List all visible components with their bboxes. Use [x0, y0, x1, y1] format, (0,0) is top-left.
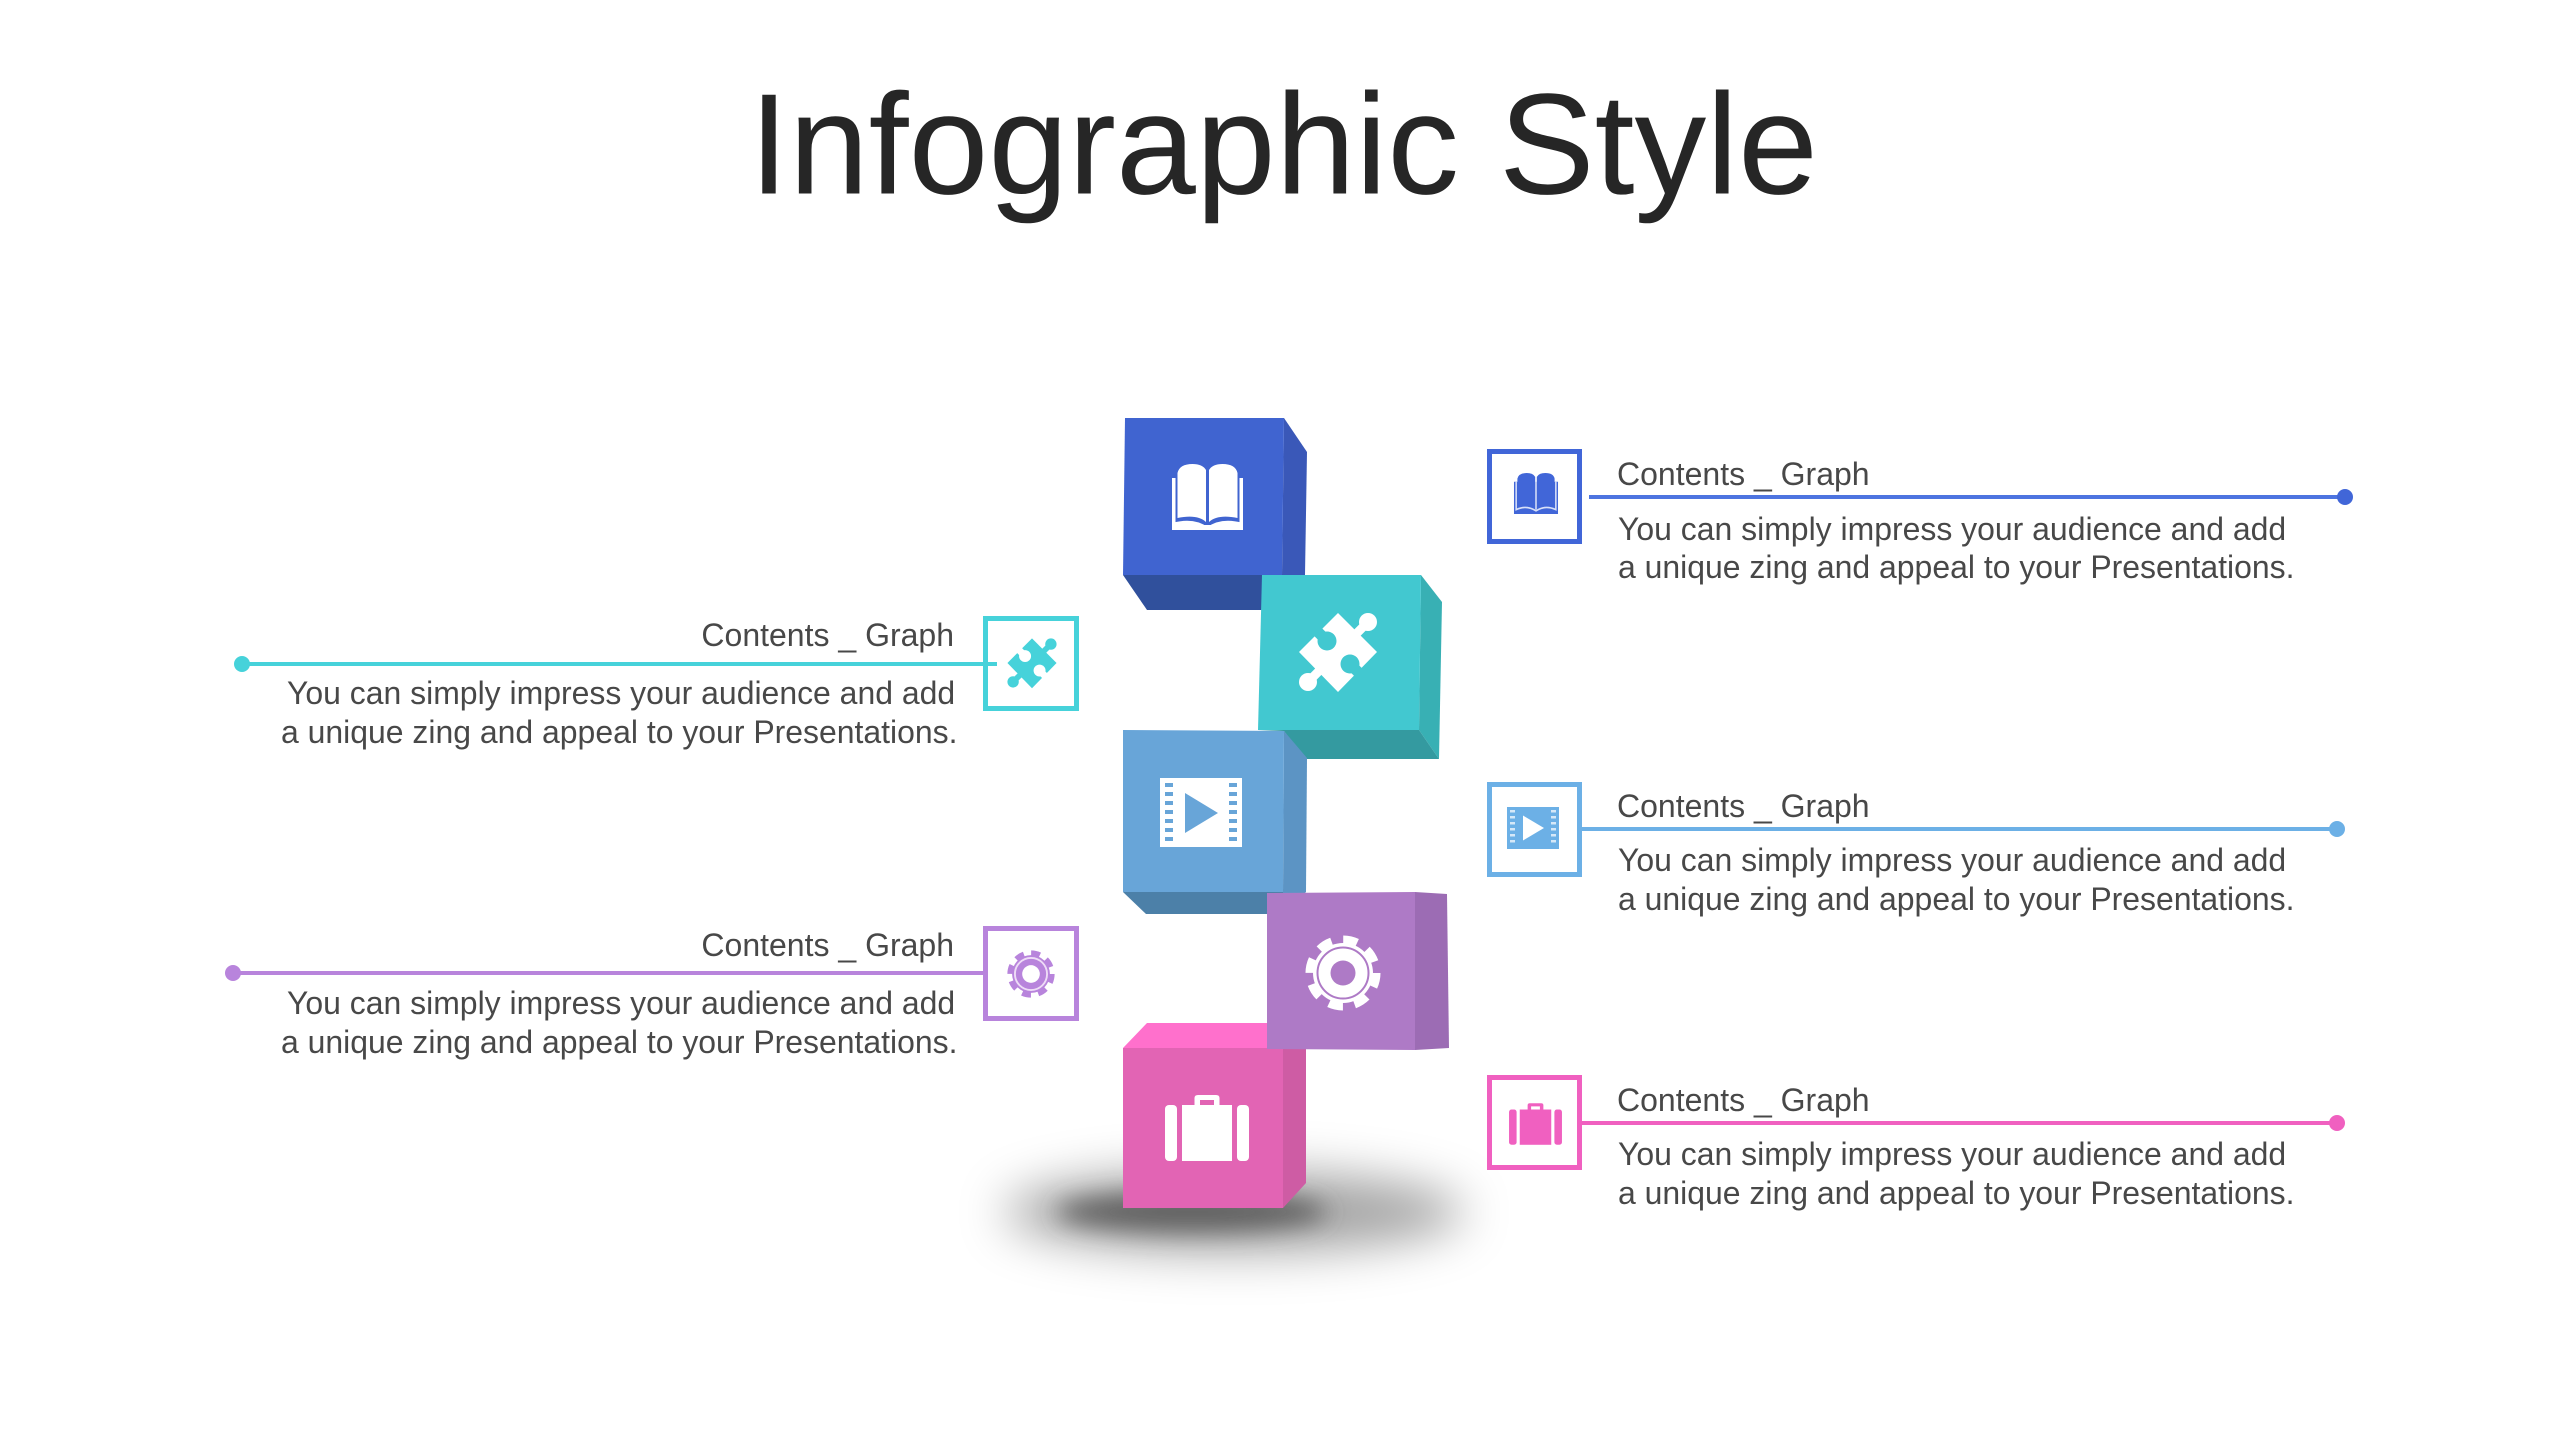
body text: a unique zing and appeal to your Presentations. — [1618, 1175, 2294, 1211]
title: Infographic Style — [749, 64, 1818, 224]
icon box: gear — [986, 928, 1076, 1018]
body text: a unique zing and appeal to your Presentations. — [1618, 881, 2294, 917]
icon: book — [1172, 464, 1243, 530]
connector line — [1582, 827, 2337, 831]
dot — [2329, 1115, 2345, 1131]
connector line — [233, 971, 985, 975]
body text: You can simply impress your audience and add — [287, 675, 955, 711]
cube: book — [1123, 418, 1307, 610]
icon: puzzle — [1299, 613, 1377, 692]
cube: gear — [1267, 892, 1449, 1050]
dot — [225, 965, 241, 981]
dot — [234, 656, 250, 672]
cube: video — [1123, 730, 1307, 914]
heading: Contents _ Graph — [701, 927, 954, 963]
body text: You can simply impress your audience and add — [287, 985, 955, 1021]
icon box: briefcase — [1490, 1078, 1580, 1168]
heading: Contents _ Graph — [1617, 456, 1870, 492]
icon: film strip — [1160, 778, 1242, 847]
icon box: book — [1490, 452, 1580, 542]
heading: Contents _ Graph — [701, 617, 954, 653]
icon: briefcase — [1165, 1095, 1249, 1161]
icon box: puzzle — [986, 618, 1076, 708]
dot — [2337, 489, 2353, 505]
connector line — [1582, 1121, 2337, 1125]
cube: puzzle — [1258, 575, 1442, 759]
cube: briefcase — [1123, 1023, 1306, 1208]
body text: You can simply impress your audience and add — [1618, 511, 2286, 547]
panel: book contents — [1490, 452, 2353, 585]
body text: a unique zing and appeal to your Presentations. — [281, 1024, 958, 1060]
panel: video contents — [1490, 784, 2345, 917]
body text: a unique zing and appeal to your Presentations. — [281, 714, 958, 750]
connector line — [242, 662, 997, 666]
heading: Contents _ Graph — [1617, 1082, 1870, 1118]
body text: a unique zing and appeal to your Presentations. — [1618, 549, 2294, 585]
dot — [2329, 821, 2345, 837]
panel: puzzle contents — [234, 617, 1076, 750]
icon box: film strip — [1490, 784, 1580, 874]
body text: You can simply impress your audience and add — [1618, 1136, 2286, 1172]
heading: Contents _ Graph — [1617, 788, 1870, 824]
panel: gear contents — [225, 927, 1076, 1060]
panel: briefcase contents — [1490, 1078, 2345, 1211]
body text: You can simply impress your audience and add — [1618, 842, 2286, 878]
connector line — [1589, 495, 2345, 499]
icon: gear — [1310, 940, 1376, 1006]
ground shadow — [1004, 1172, 1464, 1252]
cube stack — [1004, 418, 1464, 1252]
